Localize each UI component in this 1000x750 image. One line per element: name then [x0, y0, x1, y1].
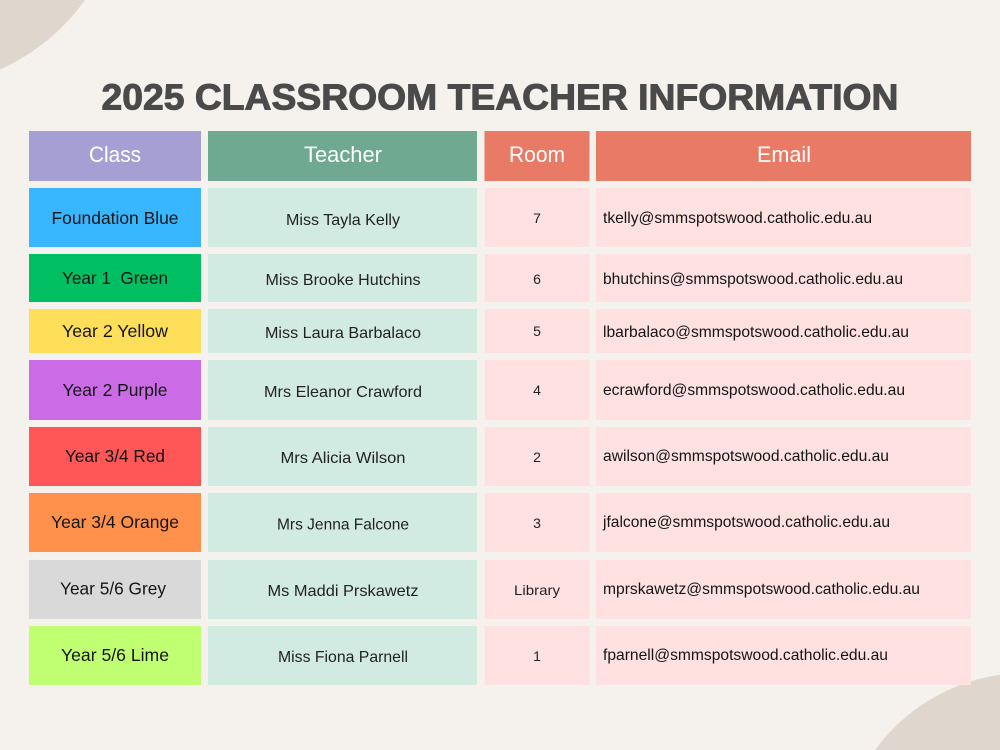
row: Year 2 Purple [29, 360, 971, 420]
class cell [29, 560, 201, 619]
email cell [596, 427, 971, 486]
room cell [484, 309, 590, 353]
decorative circle: bottom right [875, 675, 1000, 750]
header: Teacher: Teacher [304, 142, 382, 167]
room cell [484, 254, 590, 302]
teacher cell [208, 360, 477, 420]
class cell [29, 254, 201, 302]
email cell: bhutchins@smmspotswood.catholic.edu.au [603, 271, 903, 288]
room cell [484, 427, 590, 486]
title: 2025 CLASSROOM TEACHER INFORMATION [102, 76, 898, 118]
room cell: 6 [533, 271, 541, 287]
teacher cell: Miss Tayla Kelly [286, 212, 400, 229]
header: Room [484, 131, 590, 181]
email cell [596, 560, 971, 619]
class cell [29, 360, 201, 420]
email cell [596, 626, 971, 685]
row: Year 5/6 Lime [29, 626, 971, 685]
room cell [484, 360, 590, 420]
class cell: Year 5/6 Grey [60, 578, 166, 598]
email cell: fparnell@smmspotswood.catholic.edu.au [603, 647, 888, 664]
class cell: Year 3/4 Orange [51, 512, 179, 532]
row: Year 3/4 Orange [29, 493, 971, 552]
table [29, 131, 971, 685]
room cell [484, 560, 590, 619]
row: Foundation Blue [29, 188, 971, 247]
teacher cell [208, 188, 477, 247]
row: Year 5/6 Grey [29, 560, 971, 619]
email cell [596, 254, 971, 302]
class cell: Foundation Blue [52, 208, 178, 228]
room cell: 4 [533, 382, 541, 398]
teacher cell [208, 493, 477, 552]
room cell [484, 626, 590, 685]
row: Year 2 Yellow [29, 309, 971, 353]
teacher cell: Mrs Alicia Wilson [280, 450, 406, 467]
class cell [29, 188, 201, 247]
room cell: 7 [533, 210, 541, 226]
teacher cell: Mrs Jenna Falcone [277, 516, 409, 534]
teacher cell [208, 427, 477, 486]
email cell: ecrawford@smmspotswood.catholic.edu.au [603, 382, 905, 399]
decorative circle: top left [0, 0, 85, 70]
teacher cell: Miss Fiona Parnell [278, 649, 408, 666]
email cell [596, 309, 971, 353]
header: Teacher [208, 131, 477, 181]
email cell [596, 360, 971, 420]
email cell: jfalcone@smmspotswood.catholic.edu.au [602, 514, 890, 531]
class cell [29, 427, 201, 486]
header: Email [596, 131, 971, 181]
teacher cell: Ms Maddi Prskawetz [268, 583, 418, 600]
header: Class: Class [89, 142, 141, 167]
class cell: Year 2 Purple [62, 380, 168, 400]
class cell [29, 626, 201, 685]
class cell: Year 1 Green [62, 268, 168, 288]
room cell: 2 [533, 449, 541, 465]
email cell: tkelly@smmspotswood.catholic.edu.au [603, 210, 872, 227]
teacher cell [208, 626, 477, 685]
room cell [484, 188, 590, 247]
email cell: awilson@smmspotswood.catholic.edu.au [603, 448, 889, 465]
class cell [29, 493, 201, 552]
teacher cell: Miss Brooke Hutchins [266, 272, 420, 289]
email cell [596, 493, 971, 552]
header row [29, 131, 971, 181]
room cell: Library [514, 582, 560, 598]
teacher cell: Mrs Eleanor Crawford [264, 384, 422, 401]
teacher cell [208, 309, 477, 353]
room cell: 1 [533, 648, 541, 664]
teacher cell [208, 254, 477, 302]
room cell: 3 [533, 515, 541, 531]
room cell [484, 493, 590, 552]
class cell [29, 309, 201, 353]
header: Room: Room [509, 142, 565, 167]
class cell: Year 5/6 Lime [61, 645, 169, 665]
class cell: Year 3/4 Red [65, 446, 165, 466]
email cell: lbarbalaco@smmspotswood.catholic.edu.au [603, 324, 909, 341]
row: Year 3/4 Red [29, 427, 971, 486]
teacher cell: Miss Laura Barbalaco [265, 325, 421, 342]
email cell: mprskawetz@smmspotswood.catholic.edu.au [603, 581, 920, 598]
header: Class [29, 131, 201, 181]
header: Email: Email [757, 142, 811, 167]
email cell [596, 188, 971, 247]
class cell: Year 2 Yellow [62, 321, 168, 341]
room cell: 5 [533, 323, 541, 339]
teacher cell [208, 560, 477, 619]
row: Year 1 Green [29, 254, 971, 302]
